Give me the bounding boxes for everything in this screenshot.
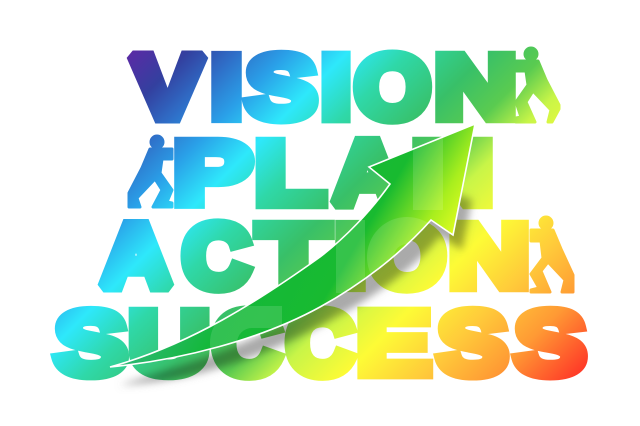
word: ACTION: A xyxy=(101,205,171,306)
word: SUCCESS: S xyxy=(438,293,508,393)
word: VISION: S xyxy=(246,37,317,137)
word: ACTION xyxy=(101,205,530,307)
word: ACTION: T xyxy=(258,206,329,307)
word: SUCCESS: U xyxy=(128,293,210,393)
word: VISION: I xyxy=(321,38,351,138)
word: VISION: V xyxy=(132,37,203,137)
icon: figure pushing ACTION xyxy=(531,217,573,292)
word: SUCCESS: E xyxy=(356,293,431,394)
word: ACTION: C xyxy=(183,206,250,307)
word: PLAN xyxy=(173,123,494,224)
word: VISION: I xyxy=(210,37,243,138)
word: PLAN: P xyxy=(173,123,252,224)
icon: figure pushing PLAN xyxy=(129,136,172,207)
word: VISION: N xyxy=(434,37,517,137)
word: SUCCESS: C xyxy=(213,293,281,394)
letter ghosts seen through arrow xyxy=(210,138,443,348)
growth arrow xyxy=(110,124,475,380)
word: PLAN: N xyxy=(411,123,494,223)
word: PLAN: A xyxy=(333,123,402,223)
word: ACTION: O xyxy=(369,206,445,306)
word: SUCCESS xyxy=(55,293,586,394)
word: SUCCESS: S xyxy=(55,293,127,394)
arrow shadow xyxy=(120,190,472,385)
word: SUCCESS: S xyxy=(515,293,586,393)
word: PLAN: L xyxy=(254,123,325,223)
icon: figure pushing VISION xyxy=(516,48,559,122)
word: SUCCESS: C xyxy=(287,293,354,394)
word: VISION: O xyxy=(355,37,430,137)
word: ACTION: I xyxy=(334,206,367,307)
word: ACTION: N xyxy=(448,206,530,306)
word: VISION xyxy=(132,37,517,138)
